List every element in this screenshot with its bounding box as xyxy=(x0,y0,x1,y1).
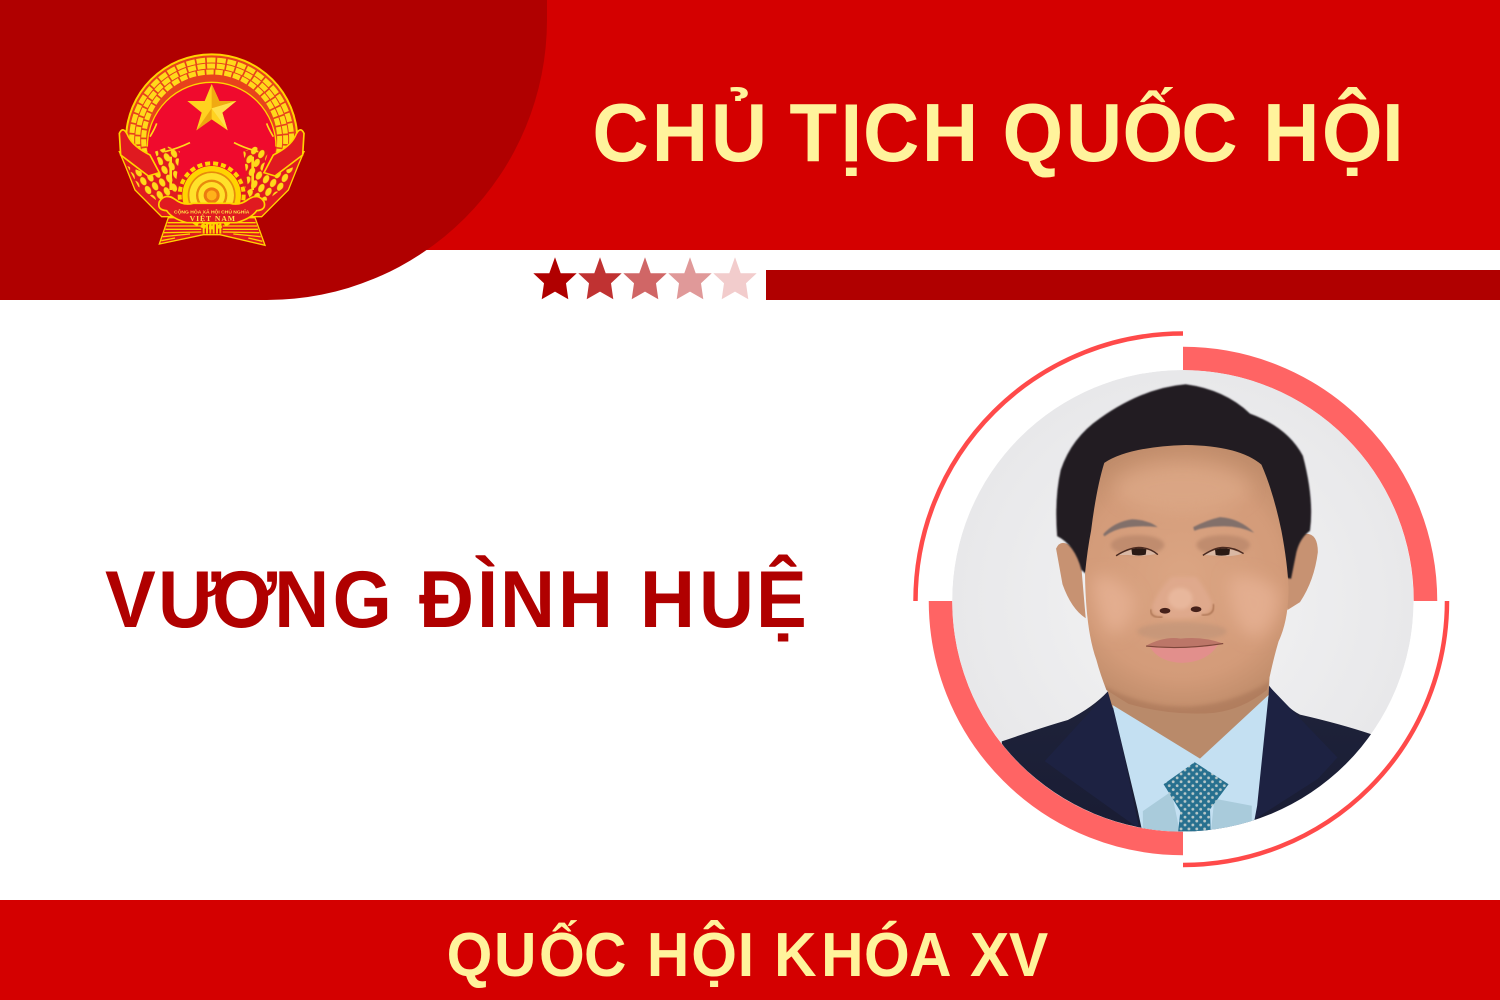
footer band xyxy=(0,900,1500,1000)
portrait eyes xyxy=(1116,547,1244,556)
star 2 xyxy=(578,257,622,299)
portrait lips xyxy=(1146,638,1223,663)
portrait undershirt shade xyxy=(1143,793,1252,832)
portrait shirt xyxy=(1112,695,1269,834)
portrait ears xyxy=(1056,534,1318,618)
header band xyxy=(0,0,1500,250)
header dark rounded panel xyxy=(0,0,547,300)
emblem star xyxy=(187,84,236,130)
ring: thin lower-right arc xyxy=(1183,601,1447,865)
portrait nose xyxy=(1151,577,1214,618)
emblem left ribbon xyxy=(119,130,159,176)
emblem lower silhouette xyxy=(119,152,304,217)
emblem disc xyxy=(126,53,298,152)
emblem base xyxy=(159,218,265,245)
title: CHỦ TỊCH QUỐC HỘI xyxy=(592,87,1404,180)
star 5 xyxy=(713,257,757,299)
portrait jaw shade xyxy=(1105,683,1268,714)
portrait moustache shade xyxy=(1138,622,1226,639)
name: VƯƠNG ĐÌNH HUỆ xyxy=(105,554,807,645)
portrait photo xyxy=(952,370,1414,856)
ring: thick upper-right arc xyxy=(1183,358,1426,601)
dark accent bar xyxy=(766,270,1500,300)
portrait suit xyxy=(1002,686,1371,832)
footer text: QUỐC HỘI KHÓA XV xyxy=(447,919,1049,989)
emblem left wheat xyxy=(127,123,190,201)
portrait eyebrows xyxy=(1103,517,1254,536)
rating stars xyxy=(533,257,757,299)
portrait hair xyxy=(1056,384,1311,579)
portrait lapels xyxy=(1045,686,1337,829)
emblem scroll banner xyxy=(159,196,265,223)
star 4 xyxy=(668,257,712,299)
icon: national emblem of Vietnam xyxy=(119,53,304,245)
portrait neck xyxy=(1104,674,1270,759)
portrait cheek highlights xyxy=(1093,575,1279,638)
star 3 xyxy=(623,257,667,299)
portrait background xyxy=(952,370,1414,744)
portrait face shading xyxy=(1093,463,1279,720)
ring: thick lower-left arc xyxy=(940,601,1183,844)
emblem red centre xyxy=(147,82,276,177)
portrait eye sockets xyxy=(1111,535,1164,555)
portrait tie xyxy=(1164,762,1229,834)
star 1 xyxy=(533,257,577,299)
emblem right ribbon xyxy=(264,130,304,176)
ring: thin upper-left arc xyxy=(916,334,1183,601)
portrait forehead highlight xyxy=(1123,468,1242,502)
portrait face xyxy=(1085,445,1289,714)
emblem inner ring line xyxy=(147,82,276,147)
emblem motto: CỘNG HÒA XÃ HỘI CHỦ NGHĨA xyxy=(174,207,250,214)
emblem country name: VIỆT NAM xyxy=(190,214,235,223)
emblem gear xyxy=(180,163,244,227)
emblem right wheat xyxy=(234,123,296,201)
